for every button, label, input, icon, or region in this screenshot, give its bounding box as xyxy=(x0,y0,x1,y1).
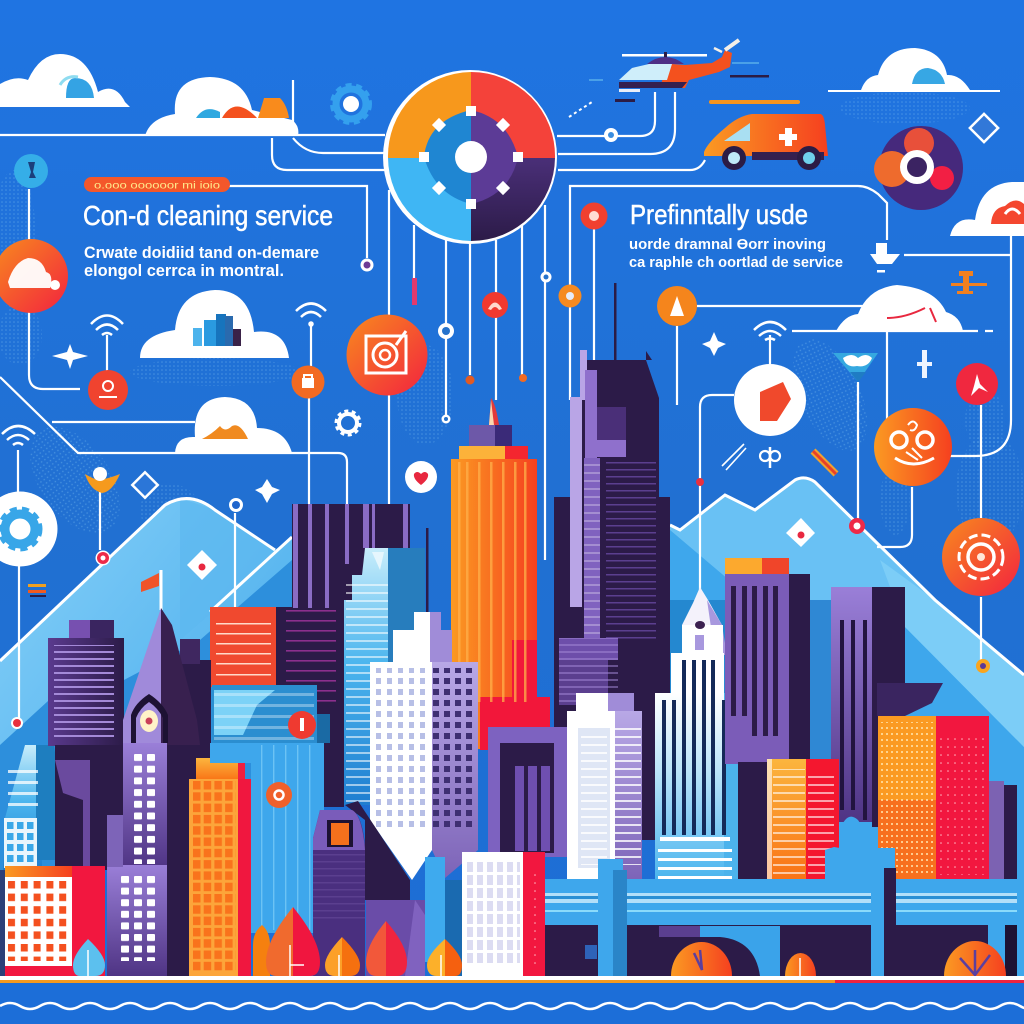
tree: orange round one xyxy=(671,942,732,976)
icon: gear outline xyxy=(336,411,360,435)
trees xyxy=(73,907,1006,976)
small connector nodes xyxy=(11,202,990,729)
tree: red xyxy=(366,921,407,976)
left mountain xyxy=(0,498,292,870)
tower: orange grid xyxy=(189,758,251,976)
right heading: Prefinntally usde xyxy=(630,199,808,230)
tower: purple frame xyxy=(488,727,567,857)
wave xyxy=(0,1003,1024,1009)
tower: red orange xyxy=(451,398,550,750)
right description: ca raphle ch oortlad de service xyxy=(629,255,843,271)
tower: glass steps xyxy=(344,528,428,805)
icon: white circle with glove xyxy=(734,364,806,436)
tree: orange right xyxy=(427,939,462,976)
icon: wifi far left xyxy=(2,426,35,445)
connector lines xyxy=(0,80,1011,720)
ground line xyxy=(0,976,1024,983)
skyline xyxy=(0,350,1024,976)
tower: orange red dotted xyxy=(878,716,989,879)
tower: tall dark center xyxy=(554,350,670,840)
right mid cloud xyxy=(836,285,963,331)
left edge sliver xyxy=(0,870,5,976)
tower: far left blue xyxy=(3,745,70,870)
icon: sparkle right xyxy=(702,332,726,356)
icon: orange gear circle xyxy=(942,518,1020,596)
icon: connector node on helicopter line xyxy=(604,128,618,142)
tower: art deco white and blue xyxy=(655,587,750,880)
tree: orange back xyxy=(253,925,270,976)
icon: small strokes xyxy=(722,444,836,474)
water band xyxy=(0,983,1024,1024)
left description xyxy=(84,244,319,280)
icon: large red target circle xyxy=(346,314,428,396)
badge: red on glass xyxy=(288,711,316,739)
lower left cloud xyxy=(175,397,292,453)
bridge understructure xyxy=(545,925,1024,976)
left tag pill xyxy=(84,177,230,192)
icon: van xyxy=(704,100,828,170)
icon: heart circle xyxy=(405,461,437,493)
halftone texture patches xyxy=(0,92,1024,549)
tower: lavender with dark bars xyxy=(810,587,905,827)
tower: blue glass block xyxy=(212,685,330,743)
tower: blue pair xyxy=(425,857,462,976)
tree: orange round small xyxy=(785,953,816,976)
icon: cluster badge xyxy=(874,126,963,210)
icon: person red circle xyxy=(88,370,128,410)
icon: gear white circle xyxy=(0,492,58,566)
icon: orange cloud circle xyxy=(0,239,68,313)
badge: orange on blue tower xyxy=(266,782,292,808)
icon: small orange tool xyxy=(951,271,987,294)
tree: small orange xyxy=(325,937,360,976)
purple block with orange window xyxy=(313,801,425,976)
icon: boat xyxy=(870,243,900,272)
tower: blue with ribs xyxy=(210,743,324,933)
icon: sparkle left xyxy=(52,344,88,369)
right description: uorde dramnal Ɵorr inoving xyxy=(629,237,826,253)
icon: star red circle xyxy=(956,363,998,405)
icon: blue pin circle xyxy=(14,154,48,188)
tree: blue xyxy=(73,939,105,976)
top left cloud xyxy=(0,54,130,107)
tower: white lavender striped xyxy=(567,693,642,879)
center cloud with skyline xyxy=(140,290,289,358)
icon: wifi right xyxy=(754,322,786,340)
tower: orange red small xyxy=(767,759,839,879)
tree: large red xyxy=(266,907,320,976)
icon: orange tower circle xyxy=(657,286,697,326)
icon: sparkle center xyxy=(255,479,280,503)
tower: purple with dark top xyxy=(725,558,810,880)
top right cloud xyxy=(828,48,1000,92)
central donut chart xyxy=(383,70,557,244)
left tag pill: o.ooo oooooor mi ioio xyxy=(94,180,221,192)
icon: blue gear top xyxy=(332,85,370,123)
left description: elongol cerrca in montral. xyxy=(84,262,284,280)
icon: cup shape xyxy=(833,353,878,382)
right description xyxy=(629,237,843,271)
icon: orange lock circle xyxy=(292,366,324,398)
icon: diamond pattern top right xyxy=(970,114,998,142)
tower: dark purple far right xyxy=(989,781,1017,879)
donut markers xyxy=(419,106,523,209)
icon: diamond on left mountain xyxy=(187,550,217,580)
icon: helicopter xyxy=(569,40,769,117)
icon: cross xyxy=(917,350,932,378)
icon: wifi center xyxy=(296,304,326,326)
low orange building left xyxy=(5,866,105,976)
left description: Crwate doidiid tand on-demare xyxy=(84,244,319,262)
icon: diamond on right mountain xyxy=(786,518,815,547)
tower: dark roof right xyxy=(877,683,943,716)
bridge deck xyxy=(545,817,1024,976)
top center cloud with icons xyxy=(145,77,298,136)
left heading: Con-d cleaning service xyxy=(83,200,333,231)
right edge cloud xyxy=(915,182,1024,236)
icon: small bird xyxy=(85,467,120,493)
tower: dark striped left xyxy=(48,620,125,870)
icon: small stripes xyxy=(28,584,46,597)
tower: orange and dark block xyxy=(210,607,344,807)
icon: flag xyxy=(141,570,161,610)
tower: white lavender windows xyxy=(370,612,478,880)
icon: diamond pattern left xyxy=(132,472,158,498)
tower: white with red side xyxy=(462,852,545,976)
tower: top dark striped xyxy=(292,504,410,608)
tree: orange round two xyxy=(944,941,1006,976)
right mountain xyxy=(670,478,1024,880)
tower: steeple xyxy=(107,608,211,976)
icon: wifi left xyxy=(91,316,123,335)
icon: orange face circle xyxy=(874,408,952,486)
